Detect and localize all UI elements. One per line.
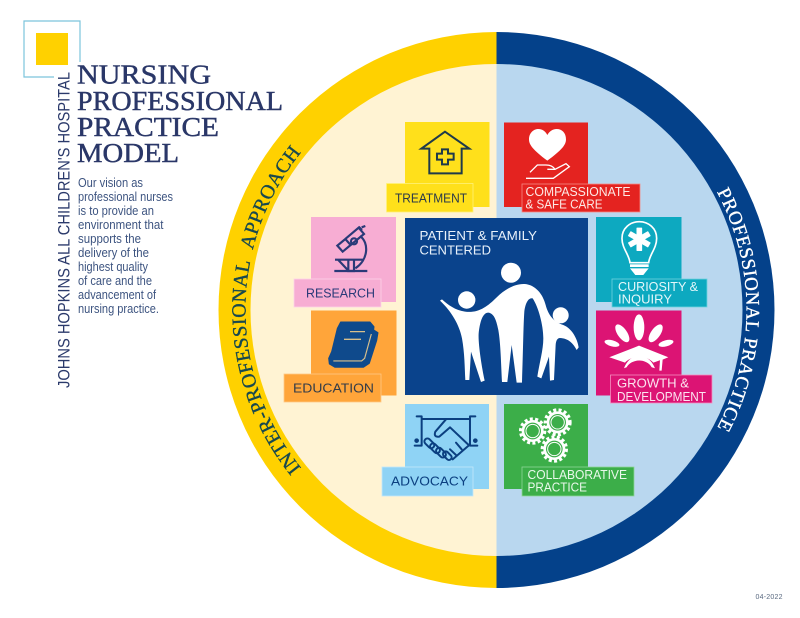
icon: light bulb with star of life [622, 222, 657, 275]
panel: advocacy: ADVOCACY [391, 474, 468, 489]
panel: patient and family centered [405, 218, 588, 395]
panel: growth and development [596, 310, 712, 404]
model circle [219, 32, 775, 588]
panel: curiosity and inquiry [596, 217, 707, 307]
vision statement: of care and the [78, 274, 152, 288]
title: NURSING [77, 58, 211, 90]
panel: treatment: TREATMENT [395, 190, 467, 206]
heading: patient and family centered [420, 228, 537, 258]
logo: yellow square in outlined frame [24, 21, 80, 77]
icon: house with cross [421, 132, 469, 173]
title: MODEL [77, 137, 179, 168]
icon: handshake [415, 416, 477, 461]
revision date: 04-2022 [756, 594, 783, 601]
panel: curiosity and inquiry: CURIOSITY & [618, 279, 698, 294]
panel: compassionate and safe care: & SAFE CARE [526, 196, 603, 211]
panel: compassionate and safe care [504, 122, 640, 212]
panel: education [284, 310, 396, 402]
icon: book [329, 322, 378, 367]
icon: family figures [440, 263, 579, 383]
vision statement: nursing practice. [78, 302, 159, 316]
heading: patient and family centered: PATIENT & FAMILY [420, 228, 537, 243]
panel: collaborative practice: PRACTICE [528, 480, 587, 495]
vision statement: Our vision as [78, 176, 143, 190]
vision statement: professional nurses [78, 190, 173, 204]
panel: growth and development: DEVELOPMENT [617, 389, 706, 404]
vertical hospital name: JOHNS HOPKINS ALL CHILDREN'S HOSPITAL [56, 72, 74, 388]
icon: gears [521, 410, 570, 461]
panel: collaborative practice [504, 404, 634, 496]
title: PROFESSIONAL [77, 85, 283, 116]
ring label: inter-professional approach: INTER-PROFESSIONAL APPROACH [232, 144, 302, 476]
vision statement: highest quality [78, 260, 149, 274]
icon: graduation cap with leaves [604, 314, 674, 371]
vision statement: environment that [78, 218, 164, 232]
panel: collaborative practice: COLLABORATIVE [528, 467, 627, 482]
heading: patient and family centered: CENTERED [420, 243, 491, 258]
panel: education: EDUCATION [293, 380, 374, 396]
panel: treatment [386, 122, 490, 212]
panel: growth and development: GROWTH & [617, 376, 689, 391]
vision statement: advancement of [78, 288, 156, 302]
icon: heart in hand [526, 129, 569, 178]
title: PRACTICE [77, 111, 219, 142]
panel: research: RESEARCH [306, 286, 375, 300]
panel: research [294, 217, 396, 307]
vision statement: delivery of the [78, 246, 149, 260]
vision statement: supports the [78, 232, 141, 246]
panel: compassionate and safe care: COMPASSIONATE [526, 184, 631, 199]
ring label: professional practice: PROFESSIONAL PRACTICE [717, 186, 760, 432]
title [77, 58, 283, 168]
panel: curiosity and inquiry: INQUIRY [618, 292, 672, 306]
vision statement [78, 176, 173, 316]
panel: advocacy [382, 404, 489, 496]
icon: microscope [334, 226, 367, 271]
vision statement: is to provide an [78, 204, 154, 218]
